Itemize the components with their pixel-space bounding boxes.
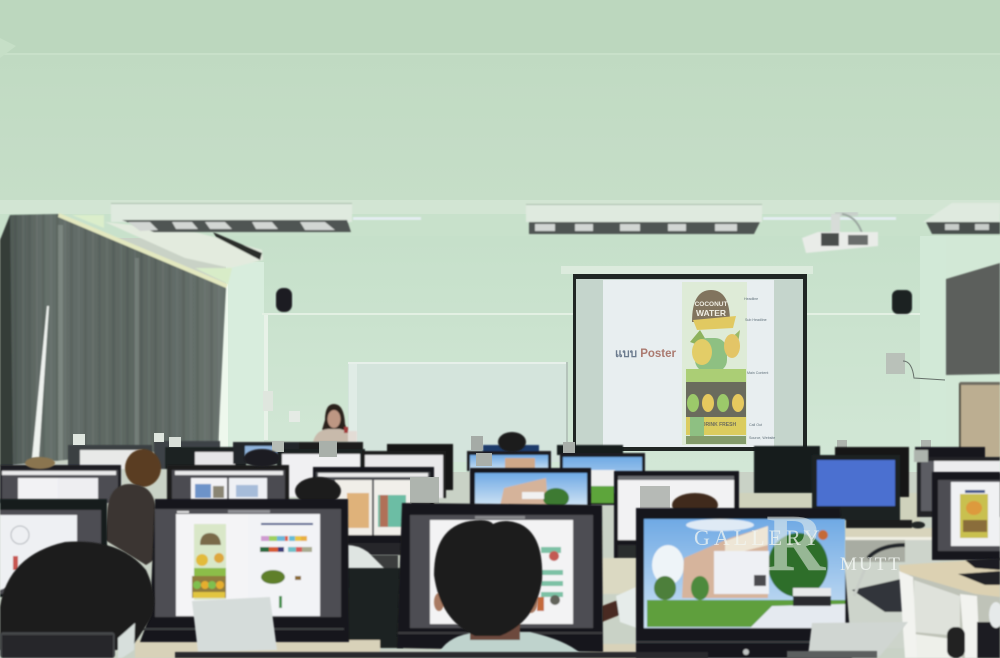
notice board right [946, 263, 1000, 375]
people [793, 588, 831, 596]
middle row: white screen monitor [614, 471, 739, 559]
switches [263, 391, 300, 422]
back row monitors [68, 441, 820, 505]
front centre monitor [397, 503, 603, 652]
front left monitor [0, 499, 107, 597]
notepad [714, 551, 769, 594]
emblem [818, 530, 828, 540]
student shirt centre-left [347, 545, 384, 568]
person at back centre [498, 432, 526, 452]
student brown hair back [25, 449, 161, 487]
poster annotation labels [744, 297, 775, 440]
tent card on front-left desk [192, 597, 277, 652]
door [959, 382, 1000, 458]
front foreground monitors [0, 632, 877, 658]
presenter [313, 404, 357, 442]
student hair behind right monitor [672, 493, 718, 517]
coconut water poster [682, 282, 747, 445]
speaker right [892, 290, 912, 314]
small desk tent cards [410, 477, 670, 508]
poster annotation labels: Main Content [747, 371, 768, 375]
curtain [0, 213, 228, 466]
air conditioner [72, 215, 263, 284]
projection screen [561, 266, 813, 451]
blue screen monitor [812, 447, 925, 528]
chair [852, 545, 905, 612]
poster thumbnail [192, 524, 226, 600]
projector [802, 214, 878, 253]
front right monitor desktop [636, 508, 852, 658]
ceiling [0, 0, 1000, 238]
poster annotation labels: Sub Headline [745, 318, 767, 322]
poster annotation labels: Source, Website [749, 436, 775, 440]
whiteboard [348, 362, 568, 462]
gallery watermark [694, 497, 902, 588]
projected slide [603, 280, 775, 447]
ceiling light left [111, 203, 352, 232]
middle row: left monitor [0, 465, 121, 503]
coconut water poster: DRINK FRESH [702, 422, 736, 428]
slit lights [353, 217, 896, 220]
coconut water poster: WATER [696, 308, 726, 318]
front left student head [0, 542, 154, 658]
right desk area behind monitors [735, 493, 940, 648]
small back tents [73, 433, 931, 466]
student arm right of centre [602, 587, 637, 628]
gallery watermark: MUTT [840, 554, 902, 575]
student long hair [105, 484, 156, 565]
far right monitor [932, 472, 1000, 560]
student hair middle row [244, 449, 280, 467]
right back monitor [914, 447, 1000, 517]
lawn [647, 600, 845, 627]
gallery watermark: GALLERY [694, 525, 823, 550]
middle row: sky desktop monitor [470, 468, 591, 508]
white cabinet desk [899, 558, 1000, 658]
speaker left [276, 288, 292, 312]
poster annotation labels: Call Out [749, 423, 762, 427]
desks between monitors [135, 555, 640, 658]
back wall [219, 236, 1000, 472]
coconut water poster: COCONUT [695, 301, 727, 308]
student centre head [415, 520, 580, 658]
building [682, 526, 768, 598]
ceiling light middle [526, 204, 762, 234]
gallery watermark: R [766, 497, 826, 588]
middle row: posters monitor [313, 467, 434, 555]
tent card front right [808, 622, 908, 656]
slide title: แบบ Poster [615, 348, 677, 360]
salad thumbnail [261, 570, 301, 608]
student hair dark centre-left [295, 477, 341, 505]
ceiling light right [923, 203, 1000, 234]
poster annotation labels: Headline [744, 297, 758, 301]
colour swatches [260, 523, 313, 552]
wall panel box and cable [886, 353, 945, 380]
middle row: second monitor [167, 465, 289, 503]
front monitor one [140, 499, 349, 642]
